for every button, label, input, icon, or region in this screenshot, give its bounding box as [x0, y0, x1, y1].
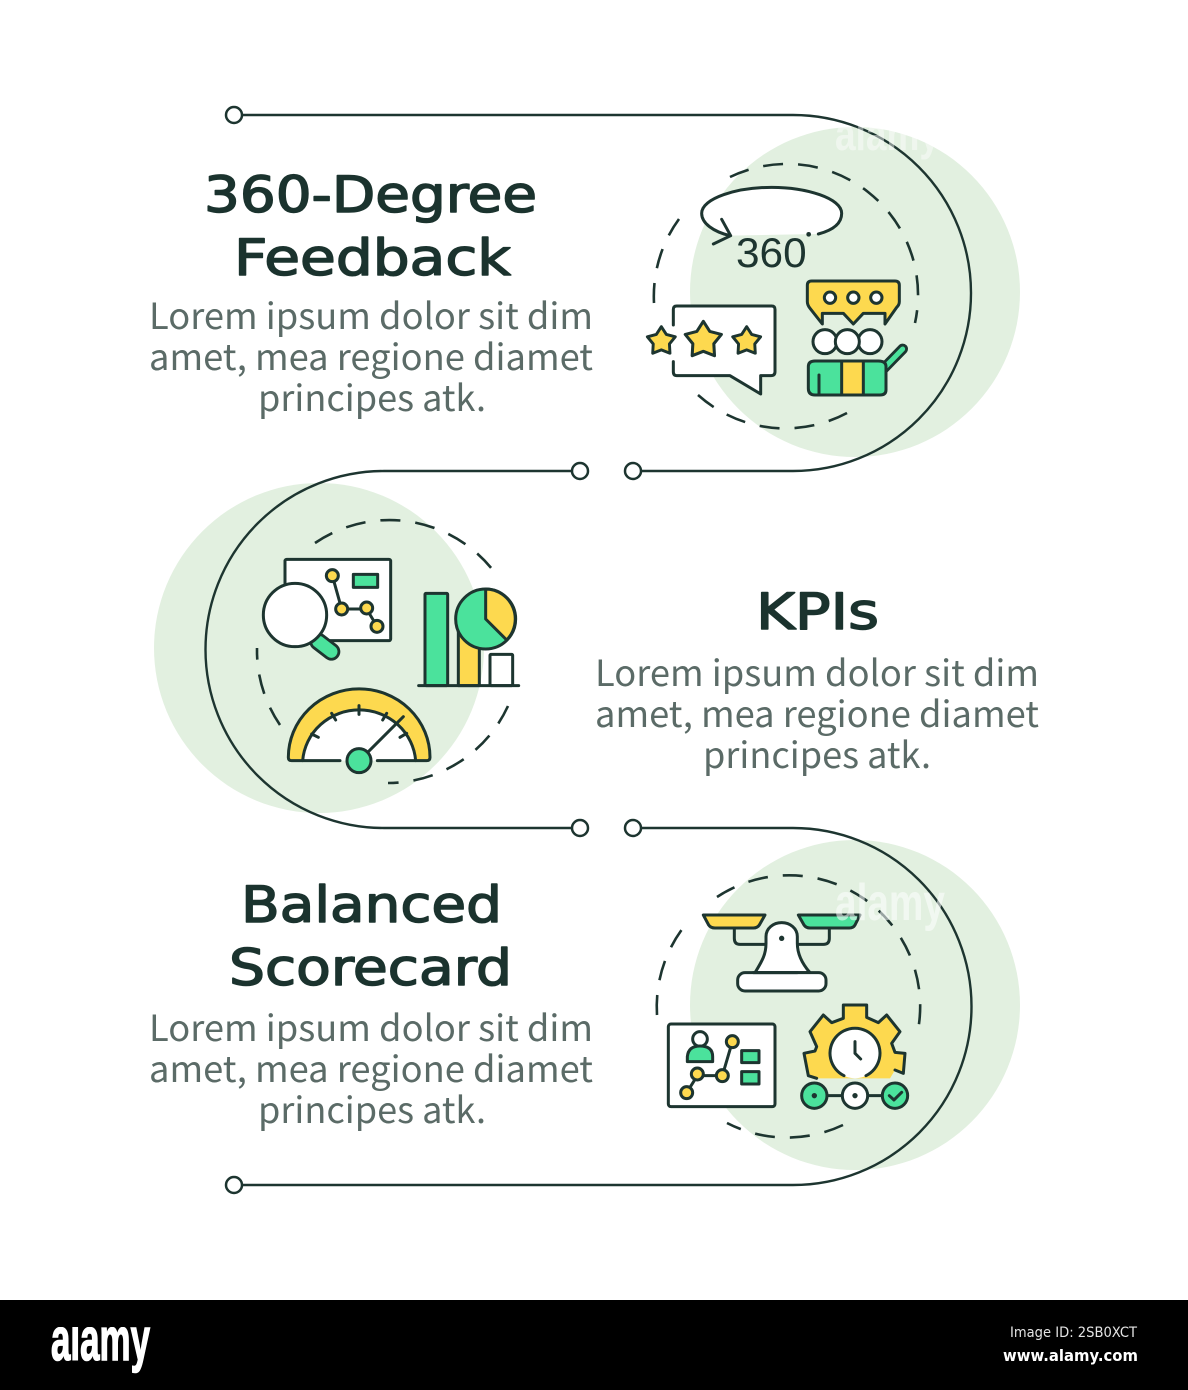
connector line — [226, 107, 971, 479]
connector line — [206, 463, 588, 836]
heading: KPIs — [756, 583, 879, 641]
watermark: top: alamy — [835, 108, 940, 160]
heading line 2: Feedback — [234, 229, 511, 287]
heading: 360-Degree — [204, 166, 537, 224]
background circle — [690, 840, 1020, 1170]
icon: rating bubble — [647, 306, 775, 394]
icon: rotation arrow — [702, 187, 842, 244]
connector line — [226, 820, 972, 1193]
body text: principes atk. — [258, 370, 486, 422]
body text: amet, mea regione diamet — [149, 329, 593, 381]
icon: magnified chart — [263, 559, 391, 652]
background circle — [690, 127, 1020, 457]
background circle — [154, 483, 484, 813]
dashed ring — [657, 875, 920, 1138]
icon: scorecard — [668, 1024, 775, 1107]
body text — [149, 288, 593, 422]
icon: dashboard, charts and gauge — [263, 559, 519, 773]
heading: Balanced — [241, 876, 502, 934]
image id: Image ID: 2SB0XCT — [1010, 1325, 1137, 1341]
body text: amet, mea regione diamet — [595, 686, 1039, 738]
body text — [595, 645, 1039, 779]
icon: team with speech bubble — [807, 281, 903, 395]
dashed ring — [257, 520, 508, 783]
body text: amet, mea regione diamet — [149, 1041, 593, 1093]
panel: KPIs — [154, 463, 1039, 836]
label: 360: 360 — [736, 230, 807, 276]
icon: scales, scorecard and gear — [668, 915, 908, 1108]
body text: Lorem ipsum dolor sit dim — [595, 645, 1039, 697]
watermark: bottom: alamy — [835, 874, 945, 932]
body text: Lorem ipsum dolor sit dim — [149, 288, 593, 340]
footer logo: alamy — [51, 1306, 150, 1373]
footer bar — [0, 1300, 1188, 1390]
icon: gear with clock and steps — [802, 1005, 908, 1108]
body text: Lorem ipsum dolor sit dim — [149, 1000, 593, 1052]
icon: speedometer gauge — [288, 689, 430, 773]
body text: principes atk. — [258, 1082, 486, 1134]
body text: principes atk. — [703, 727, 931, 779]
panel: 360-degree feedback — [149, 107, 1020, 479]
body text — [149, 1000, 593, 1134]
panel: balanced scorecard — [149, 820, 1020, 1193]
dashed ring — [654, 164, 918, 428]
heading line 2: Scorecard — [229, 939, 512, 997]
icon: 360 rotation, star rating, team feedback — [647, 187, 903, 395]
icon: balance scale — [703, 915, 860, 991]
icon: bar and pie chart — [419, 589, 519, 686]
website: www.alamy.com — [1003, 1346, 1138, 1365]
